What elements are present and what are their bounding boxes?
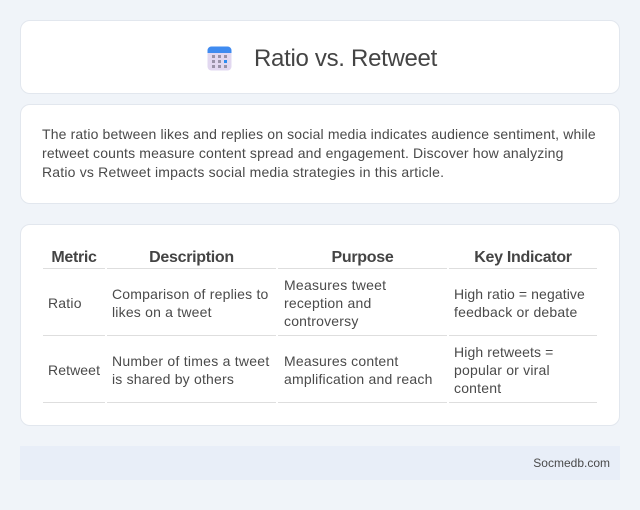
intro text xyxy=(42,126,596,180)
row: Ratio: reception and xyxy=(284,295,371,311)
panel: title card xyxy=(20,20,620,94)
header row: Metric xyxy=(51,249,97,266)
footer source text: Socmedb.com xyxy=(533,456,610,470)
panel: introduction xyxy=(20,104,620,204)
row: Retweet: Retweet xyxy=(48,362,100,378)
header row xyxy=(43,249,597,269)
table xyxy=(43,249,597,403)
row: Retweet: Measures content xyxy=(284,353,398,369)
row: Retweet: content xyxy=(454,380,501,396)
intro text: Ratio vs Retweet impacts social media strategies in this article. xyxy=(42,164,444,180)
title: Ratio vs. Retweet xyxy=(254,45,437,72)
row: Ratio: Measures tweet xyxy=(284,277,386,293)
footer bar xyxy=(20,446,620,480)
header row: Description xyxy=(149,249,234,266)
header row: Purpose xyxy=(332,249,393,266)
row: Retweet: amplification and reach xyxy=(284,371,433,387)
panel: comparison table xyxy=(20,224,620,426)
row: Retweet: Number of times a tweet xyxy=(112,353,269,369)
row: Ratio xyxy=(43,277,597,336)
row: Retweet: is shared by others xyxy=(112,371,234,387)
row: Ratio: Comparison of replies to xyxy=(112,286,269,302)
row: Retweet: High retweets = xyxy=(454,344,553,360)
header row: Key Indicator xyxy=(474,249,572,266)
row: Ratio: High ratio = negative xyxy=(454,286,585,302)
row: Retweet: popular or viral xyxy=(454,362,550,378)
row: Ratio: likes on a tweet xyxy=(112,304,212,320)
intro text: retweet counts measure content spread and engagement. Discover how analyzing xyxy=(42,145,564,161)
row: Ratio: Ratio xyxy=(48,295,82,311)
row: Ratio: controversy xyxy=(284,313,359,329)
row: Ratio: feedback or debate xyxy=(454,304,577,320)
row: Retweet xyxy=(43,344,597,403)
intro text: The ratio between likes and replies on social media indicates audience sentiment, while xyxy=(42,126,596,142)
icon: calendar xyxy=(208,46,232,70)
